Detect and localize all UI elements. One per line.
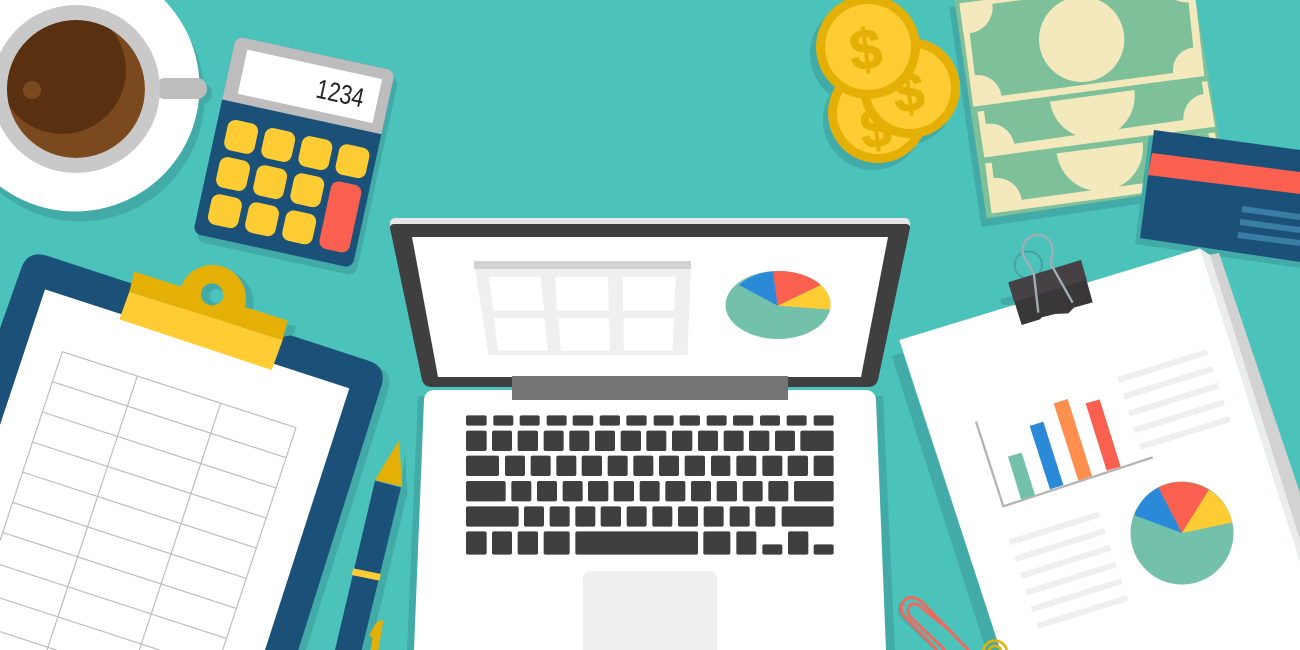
gold coins: $ xyxy=(846,16,885,84)
laptop xyxy=(390,218,910,650)
display xyxy=(238,50,382,123)
cup rim xyxy=(0,5,160,173)
text lines top xyxy=(1118,352,1230,447)
paperclip yellow xyxy=(983,641,1007,650)
trackpad xyxy=(583,571,717,650)
card stripe xyxy=(1148,153,1300,194)
screen xyxy=(412,237,888,377)
board shadow xyxy=(0,259,389,650)
hinge xyxy=(512,376,788,400)
display digits: 1234 xyxy=(313,74,367,113)
bill 3 xyxy=(985,132,1216,214)
keyboard xyxy=(466,415,834,555)
gold coins: $ xyxy=(890,60,928,125)
board xyxy=(0,254,383,650)
page shadow xyxy=(892,353,1000,650)
table grid xyxy=(0,352,296,650)
coffee cup on saucer xyxy=(0,0,212,222)
binder clip xyxy=(1008,235,1093,325)
on-screen pie chart xyxy=(726,271,831,339)
pie chart xyxy=(1130,481,1233,584)
bill 1 xyxy=(959,0,1204,106)
cup handle xyxy=(155,78,207,99)
clip shadow xyxy=(186,270,254,337)
base xyxy=(414,390,886,650)
paper xyxy=(899,248,1300,650)
credit card xyxy=(1135,130,1300,268)
bill 2 xyxy=(978,81,1215,158)
paperclip red xyxy=(900,597,968,650)
text lines bottom xyxy=(1010,514,1127,626)
coffee xyxy=(7,20,145,158)
gold coins xyxy=(810,0,960,170)
lid xyxy=(390,224,910,387)
on-screen table xyxy=(474,261,691,355)
banknotes xyxy=(941,0,1233,229)
gold coins: $ xyxy=(857,96,895,161)
yellow keys xyxy=(206,118,371,254)
base shadow xyxy=(407,396,895,650)
calculator xyxy=(191,36,400,276)
card text lines xyxy=(1238,209,1300,243)
clip xyxy=(119,265,288,370)
paper sheet xyxy=(0,289,349,650)
back pages xyxy=(1209,253,1300,539)
pen xyxy=(335,441,407,650)
lid highlight xyxy=(390,218,910,232)
bar chart xyxy=(976,399,1153,506)
report document xyxy=(892,235,1300,650)
red key xyxy=(318,180,363,254)
clipboard xyxy=(0,254,389,650)
